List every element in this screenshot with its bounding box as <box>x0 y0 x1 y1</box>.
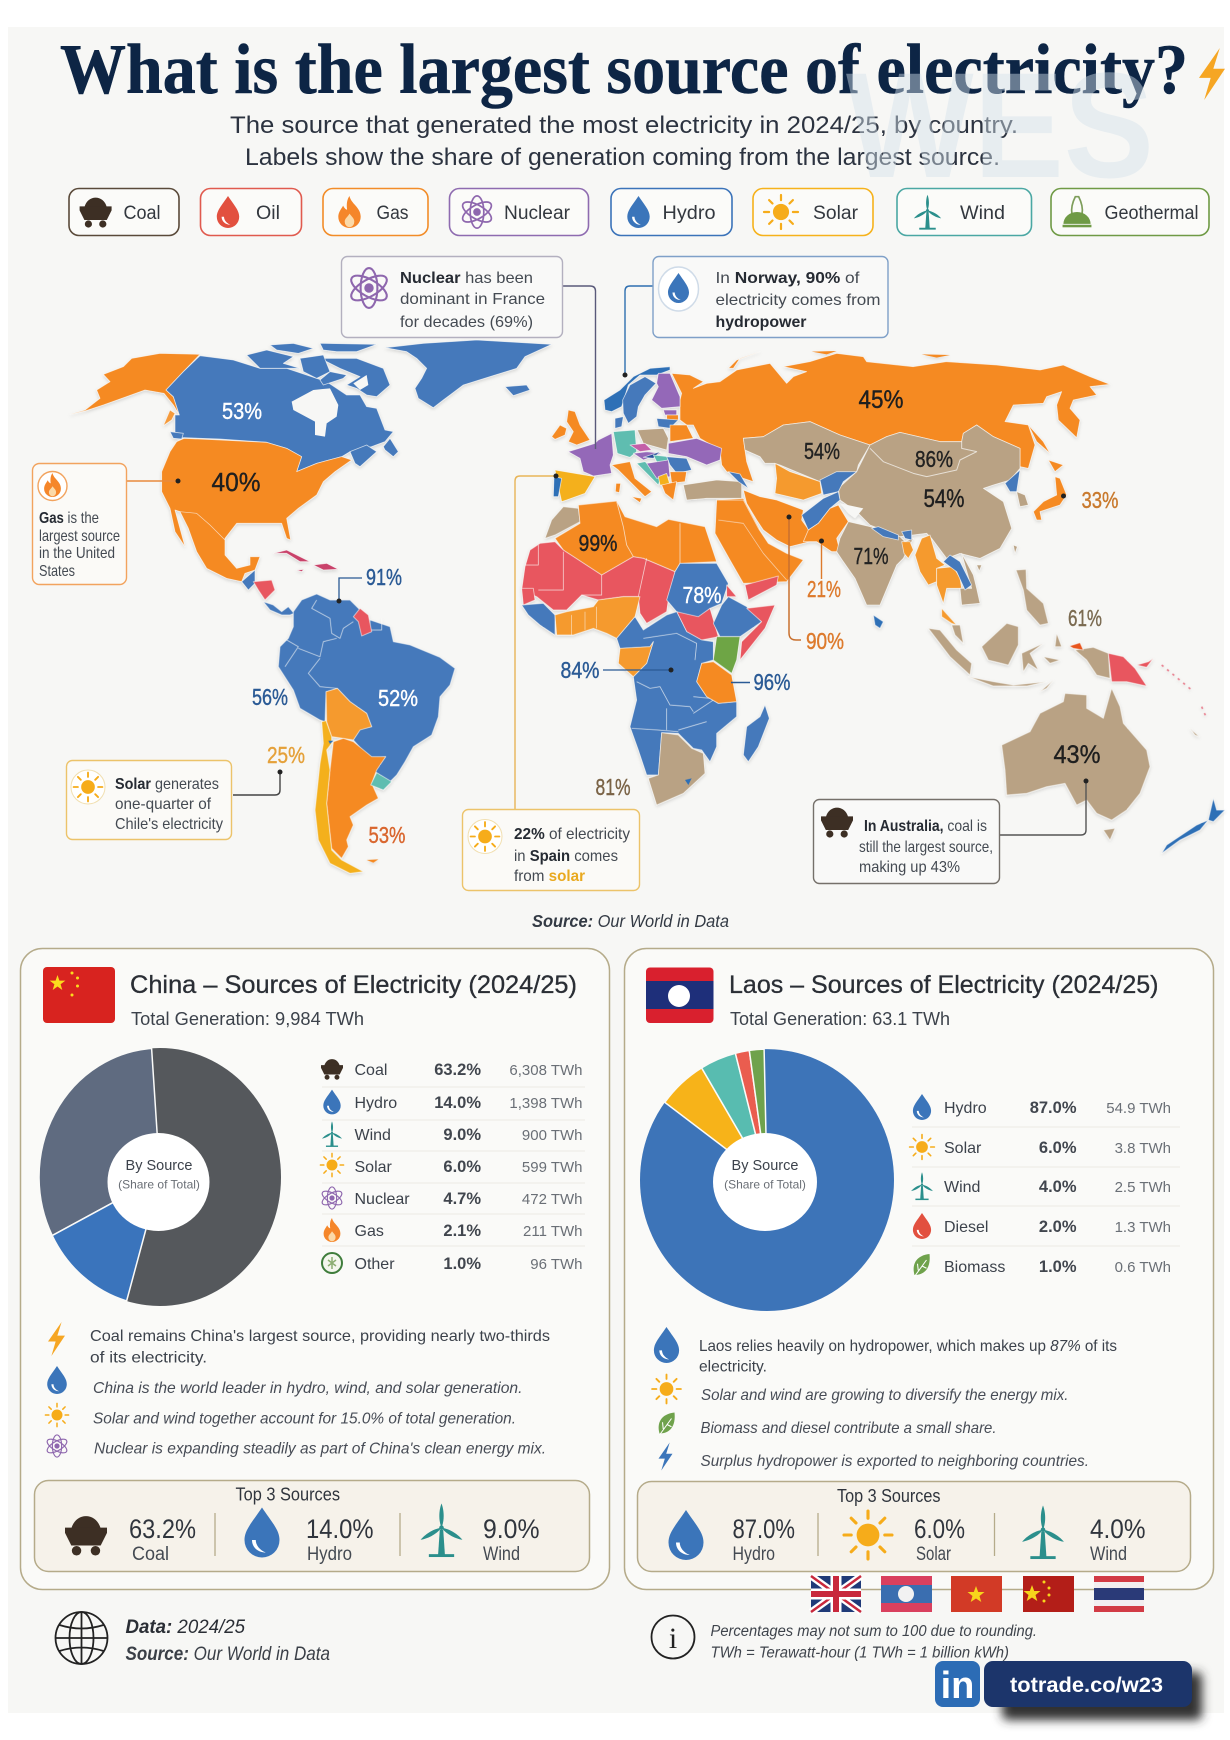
connector: 96% <box>731 682 750 684</box>
footer: data and source: Data: 2024/25 <box>126 1617 245 1638</box>
callout: nuclear France: Nuclear has been <box>400 270 533 287</box>
connector: France <box>563 286 596 449</box>
donut chart: Laos: By Source <box>732 1158 798 1174</box>
callout: gas USA: Gas is the <box>39 510 99 527</box>
data table: China: Solar <box>354 1159 393 1176</box>
total generation: China: Total Generation: 9,984 TWh <box>131 1009 364 1029</box>
data table: China: 900 TWh <box>522 1127 582 1144</box>
flag: Vietnam <box>951 1576 1002 1612</box>
flag: China small <box>1023 1576 1074 1612</box>
data table: China: 2.1% <box>443 1222 481 1240</box>
connector: 90% <box>786 514 801 640</box>
connector: Norway <box>622 286 653 378</box>
badge shadow <box>1002 1672 1202 1720</box>
callout: Chile solar: Chile's electricity <box>115 816 223 833</box>
data table: Laos: Wind <box>944 1179 980 1196</box>
legend: solar <box>753 188 873 236</box>
callout: Spain solar: 22% of electricity <box>514 826 630 843</box>
flag: Laos small <box>881 1576 932 1612</box>
legend: coal: Coal <box>124 203 160 224</box>
data table: Laos <box>910 1094 1180 1276</box>
data table: Laos: 2.0% <box>1039 1218 1077 1236</box>
key points: China: of its electricity. <box>90 1350 207 1366</box>
legend: gas <box>323 188 428 236</box>
key points: China: Nuclear is expanding steadily as part of China's clean energy mix. <box>94 1440 546 1458</box>
map percentage labels: 53% <box>368 822 406 848</box>
data table: China: 1,398 TWh <box>509 1095 582 1112</box>
data table: Laos: 1.0% <box>1039 1258 1077 1276</box>
footer: note: Percentages may not sum to 100 due to rounding. <box>710 1623 1037 1640</box>
callout: nuclear France: for decades (69%) <box>400 314 533 331</box>
panel: Laos <box>624 948 1214 1590</box>
flag: Thailand <box>1094 1576 1144 1612</box>
flag: Laos <box>646 968 714 1023</box>
legend: geothermal: Geothermal <box>1104 203 1198 224</box>
key points: Laos: Laos relies heavily on hydropower, which makes up 87% of its <box>699 1338 1117 1355</box>
data table: China: 14.0% <box>434 1094 481 1112</box>
footer: data and source: Source: Our World in Data <box>126 1644 330 1665</box>
map percentage labels: 25% <box>267 742 305 768</box>
data table: China: Nuclear <box>354 1191 410 1208</box>
data table: China: 1.0% <box>443 1255 481 1273</box>
callout: Chile solar: one-quarter of <box>115 796 212 813</box>
map: Central and East Asia <box>802 351 1067 605</box>
linkedin badge <box>935 1661 980 1707</box>
callout: nuclear France: dominant in France <box>400 291 545 308</box>
donut chart: China: (Share of Total) <box>118 1178 200 1192</box>
data table: Laos: 54.9 TWh <box>1106 1100 1171 1117</box>
callout: Spain solar: in Spain comes <box>514 848 618 865</box>
footer: data and source <box>56 1612 330 1665</box>
callout: Australia coal: In Australia, coal is <box>864 818 987 835</box>
map percentage labels: 33% <box>1082 487 1118 513</box>
data table: China: Gas <box>354 1223 384 1240</box>
legend: nuclear: Nuclear <box>504 203 571 224</box>
top 3 sources: China: 63.2% <box>129 1514 196 1544</box>
map percentage labels: 43% <box>1054 741 1100 769</box>
legend: wind <box>897 188 1032 236</box>
connector: Australia <box>1000 778 1088 835</box>
data table: China <box>320 1059 585 1273</box>
key points: China: Solar and wind together account for 15.0% of total generation. <box>93 1410 516 1428</box>
flags row <box>811 1576 1144 1612</box>
callout: Australia coal: still the largest source, <box>859 839 993 856</box>
legend: solar: Solar <box>813 203 859 224</box>
callout: gas USA: States <box>39 563 75 580</box>
callout: Norway hydro: hydropower <box>716 314 806 331</box>
legend: gas: Gas <box>376 203 408 224</box>
map: Southeast Asia and Oceania <box>873 569 1225 853</box>
marker: Japan <box>1061 494 1066 498</box>
data table: China: Other <box>354 1256 395 1273</box>
key points: Laos: Surplus hydropower is exported to neighboring countries. <box>700 1453 1089 1470</box>
subtitle <box>230 112 1018 171</box>
legend: oil <box>200 188 302 236</box>
top 3 sources: China: Top 3 Sources <box>236 1484 340 1504</box>
data table: Laos: Diesel <box>944 1219 988 1236</box>
map percentage labels: 84% <box>560 657 600 683</box>
top 3 sources: Laos: Solar <box>916 1544 952 1565</box>
map percentage labels: 45% <box>858 386 904 414</box>
top 3 sources: China: 14.0% <box>306 1514 374 1544</box>
icon: info <box>652 1616 694 1658</box>
legend: nuclear <box>450 188 588 236</box>
top 3 sources: China: Wind <box>483 1544 520 1565</box>
key points: China: China is the world leader in hydro, wind, and solar generation. <box>93 1380 522 1397</box>
connector: Spain <box>515 474 558 809</box>
map source: Source: Our World in Data <box>532 911 729 931</box>
map percentage labels <box>212 386 1118 848</box>
legend: geothermal <box>1051 188 1209 236</box>
callout: gas USA: in the United <box>39 545 115 562</box>
data table: Laos: 6.0% <box>1039 1139 1077 1157</box>
legend: oil: Oil <box>256 203 280 224</box>
total generation: Laos: Total Generation: 63.1 TWh <box>730 1009 950 1029</box>
data table: China: 63.2% <box>434 1061 481 1079</box>
top 3 sources: Laos: Hydro <box>732 1544 775 1565</box>
key points: China <box>45 1322 550 1458</box>
data table: China: 472 TWh <box>522 1191 582 1208</box>
map percentage labels: 56% <box>252 684 288 710</box>
icon: info: i <box>669 1622 677 1655</box>
data table: China: 599 TWh <box>522 1159 582 1176</box>
donut chart: Laos: (Share of Total) <box>724 1178 806 1192</box>
callout: gas USA <box>32 464 126 584</box>
data table: Laos: Solar <box>944 1140 982 1157</box>
legend: coal <box>69 188 179 236</box>
top 3 sources: China: Hydro <box>307 1544 352 1565</box>
top 3 sources: Laos: Wind <box>1090 1544 1127 1565</box>
map: Africa and Arabia <box>522 500 803 805</box>
watermark: WES <box>846 41 1154 209</box>
top 3 sources: China: 9.0% <box>483 1514 540 1544</box>
map percentage labels: 40% <box>212 467 260 497</box>
callout: Norway hydro: electricity comes from <box>716 292 880 309</box>
map percentage labels: 61% <box>1068 605 1102 631</box>
top 3 sources: China <box>34 1480 590 1572</box>
url button: totrade.co/w23 <box>1010 1674 1163 1697</box>
map: Russia, Europe and Middle East <box>552 352 1110 547</box>
map percentage labels: 78% <box>682 582 722 608</box>
legend <box>69 188 1209 236</box>
key points: Laos: Solar and wind are growing to diversify the energy mix. <box>701 1387 1068 1404</box>
top 3 sources: China: Coal <box>132 1544 169 1565</box>
flag: China <box>43 967 115 1023</box>
data table: China: 211 TWh <box>523 1223 582 1240</box>
callout: Spain solar: from solar <box>514 868 585 885</box>
donut chart: China: By Source <box>126 1158 192 1174</box>
legend: hydro <box>611 188 732 236</box>
data table: China: Wind <box>354 1127 391 1144</box>
callout: Australia coal <box>814 800 1000 884</box>
callout: Chile solar <box>66 760 232 840</box>
data table: Laos: 0.6 TWh <box>1115 1259 1171 1276</box>
top 3 sources: Laos: 87.0% <box>732 1514 795 1544</box>
key points: Laos: Biomass and diesel contribute a small share. <box>700 1420 996 1437</box>
legend: hydro: Hydro <box>662 203 716 224</box>
data table: China: 6.0% <box>443 1158 481 1176</box>
callout: gas USA: largest source <box>39 528 120 545</box>
key points: China: Coal remains China's largest source, providing nearly two-thirds <box>90 1328 550 1345</box>
url button <box>984 1661 1192 1707</box>
key points: Laos: electricity. <box>699 1358 767 1376</box>
donut chart: China <box>39 1048 281 1306</box>
map percentage labels: 54% <box>804 438 840 464</box>
map: South America <box>253 580 455 873</box>
linkedin badge: in <box>941 1665 974 1707</box>
callout: Norway hydro <box>653 256 888 338</box>
data table: China: Hydro <box>354 1095 397 1112</box>
callout: Chile solar: Solar generates <box>115 776 219 793</box>
top 3 sources: Laos: 6.0% <box>914 1514 965 1544</box>
top 3 sources: Laos: 4.0% <box>1090 1514 1146 1544</box>
data table: Laos: 4.0% <box>1039 1178 1077 1196</box>
connector: gas USA <box>127 478 180 484</box>
legend: wind: Wind <box>960 203 1005 224</box>
map percentage labels: 99% <box>578 530 618 556</box>
footer: note: TWh = Terawatt-hour (1 TWh = 1 billion kWh) <box>710 1644 1009 1662</box>
map percentage labels: 71% <box>854 543 888 569</box>
connector: Chile <box>233 770 282 795</box>
callout: Norway hydro: In Norway, 90% of <box>716 270 860 287</box>
flag: UK <box>811 1576 861 1612</box>
data table: Laos: Biomass <box>944 1259 1005 1276</box>
map percentage labels: 86% <box>915 446 953 472</box>
data table: Laos: 87.0% <box>1030 1099 1077 1117</box>
footer: note <box>652 1616 1037 1662</box>
map percentage labels: 53% <box>222 398 262 424</box>
key points: Laos <box>652 1327 1117 1470</box>
data table: China: 4.7% <box>443 1190 481 1208</box>
data table: China: Coal <box>354 1062 387 1079</box>
map percentage labels: 91% <box>366 564 402 590</box>
heading: China: China – Sources of Electricity (2024/25) <box>130 971 577 999</box>
map percentage labels: 81% <box>596 774 630 800</box>
map: North America <box>70 340 552 590</box>
map percentage labels: 90% <box>806 628 844 654</box>
panel: China <box>20 948 610 1590</box>
icon: globe <box>56 1612 108 1664</box>
top 3 sources: Laos <box>638 1482 1190 1572</box>
data table: Laos: Hydro <box>944 1100 987 1117</box>
data table: Laos: 3.8 TWh <box>1115 1140 1171 1157</box>
map percentage labels: 96% <box>754 669 790 695</box>
callout: Spain solar <box>462 810 640 890</box>
data table: China: 96 TWh <box>530 1256 582 1273</box>
map: land <box>70 340 1225 873</box>
subtitle: Labels show the share of generation coming from the largest source. <box>245 144 1000 171</box>
data table: China: 6,308 TWh <box>509 1062 582 1079</box>
map percentage labels: 21% <box>807 576 841 602</box>
data table: Laos: 2.5 TWh <box>1115 1179 1171 1196</box>
connector: 91% <box>336 578 362 604</box>
world map <box>70 340 1225 873</box>
top 3 sources: Laos: Top 3 Sources <box>837 1486 940 1506</box>
subtitle: The source that generated the most electricity in 2024/25, by country. <box>230 112 1018 139</box>
callout: nuclear France <box>342 256 562 338</box>
callout: Australia coal: making up 43% <box>859 859 960 876</box>
map percentage labels: 54% <box>924 485 964 513</box>
data table: China: 9.0% <box>443 1126 481 1144</box>
connector: 84% <box>603 668 674 672</box>
data table: Laos: 1.3 TWh <box>1115 1219 1171 1236</box>
heading: Laos: Laos – Sources of Electricity (2024/25) <box>729 971 1158 999</box>
icon: title bolt <box>1199 48 1225 100</box>
donut chart: Laos <box>640 1049 894 1311</box>
map percentage labels: 52% <box>378 685 418 711</box>
connector: 21% <box>819 538 824 579</box>
